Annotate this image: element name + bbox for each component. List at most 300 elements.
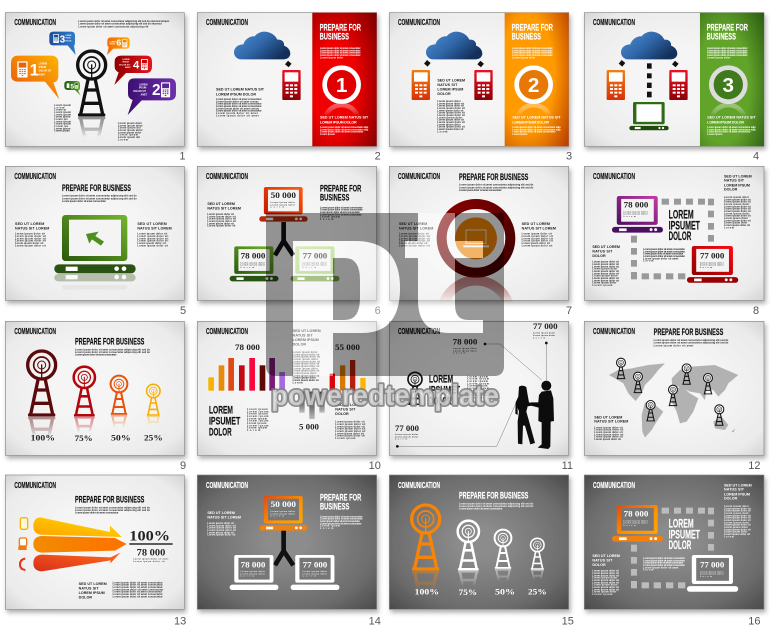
text block: bottom: DOLOR	[79, 595, 92, 599]
heading: lorem ipsumet dolor: IPSUMET	[429, 385, 460, 397]
text block: Lorem ipsum	[467, 387, 490, 390]
panel: red sidebar: Lorem ipsum dolor	[320, 56, 343, 59]
text block: intro: Lorem ipsum dolor sit amet consectetur adipiscing elit sed do	[459, 505, 534, 508]
text block: right: Lorem ipsum dolor sit	[137, 244, 168, 247]
text block: left	[207, 202, 241, 228]
icon: orange phone	[18, 538, 27, 550]
page number: 2	[375, 150, 381, 162]
text block: lower right: NATUS SIT	[335, 407, 356, 411]
tower 100%	[410, 503, 442, 594]
text block: right: Lorem ipsum	[320, 216, 341, 219]
text block: centre: Lorem ipsum dolor sit amet	[643, 566, 678, 569]
bubble 4 red: IPSUM	[122, 62, 129, 64]
callout: 77 000 bottom: Lorem ipsum dolor	[395, 435, 419, 438]
page number: 9	[180, 460, 186, 472]
text block: lower left: Lorem ipsum dolor	[592, 577, 617, 580]
panel: red sidebar: Lorem ipsum dolor sit amet consectetur adip	[320, 126, 369, 129]
icon: green laptop	[54, 215, 136, 273]
text block: lower left: Lorem ipsum	[592, 593, 613, 596]
panel: red sidebar: Lorem ipsum	[320, 133, 336, 136]
panel: orange sidebar: Lorem ipsum dolor sit amet consectetur	[512, 131, 556, 134]
laptop: 77 000	[291, 555, 339, 590]
text block: right	[522, 222, 556, 247]
text block: Lorem ipsum dolor sit amet	[216, 114, 259, 117]
text block	[467, 375, 490, 399]
text block: top right: Lorem ipsum dolor	[724, 531, 747, 534]
text block: Lorem ipsum dolor sit	[437, 126, 465, 129]
connector	[275, 531, 293, 565]
heading: lorem ipsumet dolor: LOREM	[669, 516, 694, 530]
heading: communication: COMMUNICATION	[206, 327, 248, 336]
text block: lower left: Lorem ipsum dolor sit	[592, 270, 619, 273]
page number: 6	[375, 305, 381, 317]
laptop: 77 000: Lorem ipsum dolor	[303, 570, 327, 573]
icon: green laptop	[629, 102, 669, 130]
text block: left column: Lorem ip	[54, 109, 66, 112]
laptop: 50 000	[259, 496, 308, 531]
text block: intro	[62, 195, 137, 203]
bubble 2 purple: 2	[152, 82, 161, 99]
callout: 77 000 bottom: 77 000	[395, 424, 419, 433]
text block: Lorem ipsum	[467, 392, 490, 395]
panel: green sidebar: Lorem ipsum dolor sit amet consectetur	[707, 131, 751, 134]
text block: top centre: Lorem	[293, 381, 303, 384]
text block: left: Lorem ipsum dolor sit	[207, 527, 236, 530]
text block: right column: Lorem	[118, 138, 129, 141]
panel: green sidebar: Lorem ipsum dolor sit amet consectetur	[707, 54, 748, 57]
heading: prepare for business	[320, 492, 361, 511]
text block: centre	[643, 557, 685, 572]
bar chart: right bars	[330, 360, 366, 391]
panel: orange sidebar: PREPARE FOR	[512, 23, 553, 33]
page number: 14	[369, 615, 381, 627]
text block: top right: Lorem ipsum dolor sit	[724, 519, 751, 522]
laptop: 50 000: 50 000	[271, 500, 296, 509]
text block: Lorem ipsum dolor sit	[437, 112, 465, 115]
text block: top right: Lorem ipsum dolor	[724, 203, 749, 206]
text block: right: Lorem ipsum dolor sit amet consectetur	[320, 522, 362, 525]
text block: top right: Lorem ipsum dolor sit	[724, 533, 750, 536]
bubble 2 purple: DOLOR SIT	[133, 91, 147, 93]
panel: red sidebar: Lorem ipsum dolor sit amet consectetur	[320, 131, 363, 134]
text block: lower right: Lorem ipsum	[335, 437, 356, 440]
icon: orange phone	[607, 70, 625, 100]
bubble 2 purple: IPSUM	[139, 88, 146, 90]
text block: right: Lorem ipsum dolor sit	[522, 242, 550, 245]
laptop: 77 000: Lorem	[700, 266, 712, 269]
heading: lorem ipsumet dolor: DOLOR	[669, 538, 691, 552]
laptop: 77 000: Lorem	[303, 266, 316, 269]
tower 100%: 100%	[31, 433, 55, 442]
laptop: 78 000: 78 000	[624, 510, 648, 519]
text block: lower: Lorem ipsum	[247, 424, 269, 427]
panel: slide 15 dark towers percent	[389, 475, 574, 630]
text block: LOREM IPSUM DOLOR	[216, 92, 256, 96]
text block: lower left: Lorem ipsum dolor	[592, 275, 618, 278]
laptop: 77 000: Lorem ipsum dolor	[303, 264, 327, 267]
text block: top centre: Lorem ipsum dolor	[293, 377, 316, 380]
text block: lower left: Lorem ipsum dolor sit	[592, 263, 619, 266]
text block: top centre: Lorem ipsum dolor sit	[293, 353, 319, 356]
text block: top right: Lorem ipsum dolor sit	[724, 215, 751, 218]
text block: intro: Lorem ipsum dolor sit amet consectetur adipiscing elit sed do	[459, 184, 534, 187]
text block: lower right: Lorem ipsum dolor sit	[335, 430, 365, 433]
text block: lower: Lorem ipsum	[247, 417, 268, 420]
panel: slide 5 big laptop	[5, 166, 186, 317]
tower 25%	[528, 538, 546, 594]
text block: intro: Lorem ipsum dolor sit amet consectetur adipiscing elit sed do	[459, 186, 534, 189]
laptop: 78 000: Lorem ipsum dolor	[624, 522, 648, 525]
text block: intro: Lorem ipsum dolor sit amet consectetur adipiscing elit sed do	[75, 351, 150, 354]
laptop: 78 000: Lorem ipsum dolor	[624, 213, 648, 216]
laptop: 77 000	[291, 246, 339, 281]
page number: 3	[566, 150, 572, 162]
text block: left: SED UT LOREM	[399, 222, 427, 226]
text block: left: NATUS SIT LOREM	[15, 227, 49, 231]
bubble 1 orange: AMET	[39, 73, 46, 76]
panel: slide 12 world map	[584, 321, 764, 472]
text block: left: Lorem ipsum dolor sit	[15, 242, 44, 245]
bubble 6 orange: 6	[116, 38, 121, 48]
callout: 100% and 78 000: 78 000	[137, 547, 166, 557]
text block: top right: Lorem ipsum dolor sit	[724, 219, 751, 222]
text block: top right: Lorem ipsum dolor	[724, 212, 749, 215]
text block: Lorem ipsum dolor sit	[594, 433, 623, 436]
laptop: 50 000: Lorem ipsum dolor	[271, 201, 295, 204]
panel: green sidebar	[700, 13, 764, 146]
connectors	[424, 60, 484, 67]
text block: lower: Lorem ipsum	[247, 408, 268, 411]
tower 75%: 75%	[75, 434, 93, 443]
text block: centre	[643, 248, 685, 263]
text block: centre: Lorem ipsum dolor sit amet consectetur	[643, 559, 685, 562]
tower 100%	[26, 349, 58, 440]
text block: left: Lorem ipsum dolor sit	[207, 218, 236, 221]
laptop: 50 000: Lorem ipsum dolor	[271, 203, 295, 206]
text block: intro: Lorem ipsum dolor sit amet	[654, 344, 693, 347]
icon: arrow cursor	[86, 232, 104, 246]
text block: left: Lorem ipsum dolor sit	[15, 244, 46, 247]
leader dots	[396, 342, 548, 448]
panel: orange sidebar: Lorem ipsum	[512, 133, 528, 136]
heading: prepare for business: PREPARE FOR BUSINESS	[75, 494, 144, 504]
text block: Lorem ipsum dolor sit amet	[216, 112, 258, 115]
text block: left: Lorem ipsum dolor sit	[399, 233, 429, 236]
text block: top right: Lorem ipsum dolor	[724, 521, 749, 524]
heading: communication: COMMUNICATION	[398, 327, 440, 336]
text block: lower right	[335, 403, 365, 440]
heading: communication: COMMUNICATION	[14, 481, 56, 490]
text block: lower left: NATUS SIT	[592, 249, 613, 253]
laptop reflection	[54, 274, 136, 290]
heading: communication: COMMUNICATION	[206, 172, 248, 181]
laptop: 78 000	[230, 555, 278, 590]
text block: bottom: LOREM IPSUM	[79, 591, 105, 595]
heading: communication: COMMUNICATION	[398, 18, 440, 27]
bubble 4 red: 4	[133, 59, 140, 71]
text block: Lorem ipsum dolor sit	[437, 107, 465, 110]
text block: left: Lorem ipsum dolor sit	[207, 215, 236, 218]
text block: top right: NATUS SIT	[724, 179, 745, 183]
laptop: 78 000: 78 000	[241, 252, 265, 261]
text block: top right: NATUS SIT	[724, 488, 745, 492]
text block: top right: SED UT LOREM	[724, 483, 752, 487]
icon: red phone	[669, 70, 688, 100]
text block: Lorem ipsum dolor sit	[594, 426, 623, 429]
text block: lower left: Lorem ipsum dolor sit	[592, 570, 619, 573]
bubble 3 blue	[49, 32, 76, 55]
text block: bottom: Lorem ipsum dolor sit amet consectetur	[113, 584, 163, 587]
text block	[594, 415, 628, 441]
text block: top right: Lorem ipsum dolor sit	[724, 198, 751, 201]
bubble 4 red: LOREM	[122, 59, 130, 61]
heading: prepare for business: BUSINESS	[320, 192, 349, 202]
tower 50%	[494, 528, 514, 594]
page number: 13	[174, 615, 186, 627]
text block: bottom: SED UT LOREM	[79, 582, 107, 586]
ring reflection	[440, 276, 512, 302]
laptop: 50 000	[259, 187, 308, 222]
panel: orange sidebar: Lorem ipsum dolor sit amet consectetur adip	[512, 126, 561, 129]
text block: right: Lorem	[320, 218, 334, 221]
page number: 8	[753, 305, 759, 317]
text block: right: Lorem ipsum dolor sit amet consectetur	[320, 520, 360, 523]
panel: green sidebar: SED UT LOREM NATUS SIT	[707, 116, 756, 120]
callout: 78 000: Lorem ipsum dolor	[453, 347, 477, 350]
text block: lower right: SED UT LOREM	[335, 403, 363, 407]
text block: left column: Lorem ips	[54, 118, 68, 121]
text block: lower left: Lorem ipsum dolor sit	[592, 261, 619, 264]
page number: 5	[180, 305, 186, 317]
panel: green sidebar: Lorem ipsum dolor	[707, 56, 730, 59]
text block: intro: Lorem ipsum dolor sit amet consectetur adipiscing elit sed do	[654, 339, 729, 342]
text block: right: Lorem ipsum dolor sit	[137, 237, 168, 240]
laptop: 78 000	[612, 505, 663, 542]
heading: prepare for business: BUSINESS	[320, 501, 349, 511]
heading: lorem ipsumet dolor: DOLOR	[209, 427, 232, 439]
panel: orange sidebar: 2	[528, 74, 539, 97]
text block: lower left: Lorem ipsum dolor	[592, 268, 617, 271]
text block: centre: Lorem	[643, 569, 654, 572]
heading: lorem ipsumet dolor	[429, 373, 460, 407]
text block: top right: Lorem ipsum dolor sit	[724, 210, 751, 213]
text block: Lorem ipsum	[467, 375, 489, 378]
icon: yellow phone	[20, 518, 28, 529]
heading: prepare for business: PREPARE FOR	[320, 492, 361, 502]
text block: top right: Lorem ipsum dolor	[724, 196, 749, 199]
text block: LOREM IPSUM	[437, 87, 463, 91]
panel: slide 9 towers percent	[5, 321, 186, 482]
text block: lower right: Lorem ipsum dolor sit	[335, 423, 365, 426]
text block: left column: Lorem ipsum	[54, 116, 71, 119]
callout: 77 000 bottom: Lorem ipsum dolor	[395, 433, 419, 436]
bubble 5 green	[64, 81, 81, 96]
text block: right column: Lorem ipsum dolor	[118, 129, 143, 132]
panel: orange sidebar: LOREM IPSUM DOLOR	[512, 120, 549, 124]
icon: orange phone	[412, 70, 430, 100]
text block: top right: Lorem	[724, 535, 735, 538]
text block: intro: Lorem ipsum dolor sit amet consectetur	[75, 354, 117, 357]
laptop: 78 000: 78 000	[241, 560, 265, 569]
watermark logo	[266, 213, 504, 376]
tower reflection	[78, 116, 106, 136]
laptop: 78 000: Lorem ipsum dolor	[241, 572, 265, 575]
text block: Lorem ipsum dolor sit	[594, 429, 623, 432]
text block: Lorem ipsum dolor sit amet consectetur	[216, 103, 262, 106]
text block: right: Lorem ipsum dolor sit	[522, 244, 552, 247]
panel: slide 16 dark laptops connected by squares	[584, 475, 764, 627]
text block: SED UT LOREM	[437, 78, 465, 82]
text block: right: Lorem ipsum dolor sit amet consectetur	[320, 518, 363, 521]
panel: red sidebar: PREPARE FOR	[320, 23, 361, 33]
text block: right column: Lorem ipsum dol	[118, 127, 141, 130]
text block: lower left: Lorem ipsum dolor sit	[592, 272, 619, 275]
panel: green sidebar: Lorem ipsum dolor sit amet consectetur	[707, 52, 748, 55]
chart value: 5 000: 5 000	[299, 422, 319, 431]
text block: top right: DOLOR	[724, 188, 738, 192]
text block: Lorem ipsum dolor	[437, 100, 461, 103]
bubble 1 orange: DOLOR SIT	[39, 71, 52, 73]
panel: red sidebar: Lorem ipsum dolor sit amet consectetur	[320, 52, 361, 55]
text block: centre: Lorem ipsum dolor sit amet consectetur	[643, 250, 685, 253]
text block: intro: Lorem ipsum dolor sit amet consectetur adipiscing elit sed do	[62, 195, 137, 198]
text block: Lorem ipsum	[467, 389, 488, 392]
laptop: 78 000: Lorem	[624, 524, 636, 527]
text block: top right: Lorem ipsum dolor	[724, 512, 749, 515]
laptop: 77 000: 77 000	[303, 252, 327, 261]
text block: top centre: Lorem ipsum dolor sit	[293, 360, 320, 363]
heading: prepare for business	[320, 184, 361, 202]
text block: lower left: Lorem ipsum dolor sit	[592, 574, 619, 577]
bubble 3 blue: IPSUM	[65, 38, 71, 40]
text block: lower: Lorem ipsum	[247, 415, 269, 418]
callout: 77 000 bottom	[395, 424, 419, 441]
page number: 16	[748, 615, 761, 627]
text block: Lorem ipsum dolor sit	[437, 105, 464, 108]
text block: top right: Lorem ipsum dolor sit	[724, 224, 750, 227]
laptop: 78 000: Lorem ipsum dolor	[624, 519, 648, 522]
heading: lorem ipsumet dolor	[669, 207, 700, 243]
text block: top centre: Lorem ipsum dolor	[293, 372, 317, 375]
text block: lower right: Lorem ipsum dolor sit	[335, 435, 365, 438]
panel: red sidebar: Lorem ipsum dolor sit amet consectetur	[320, 54, 361, 57]
text block: top centre: Lorem ipsum dolor sit	[293, 365, 319, 368]
text block: bottom: Lorem ipsum dolor sit amet consectetur	[113, 595, 163, 598]
text block: left: Lorem ipsum dolor sit	[207, 524, 236, 527]
text block: left	[15, 222, 49, 247]
heading: communication: COMMUNICATION	[398, 481, 440, 490]
text block: left: Lorem ipsum dolor sit	[399, 237, 430, 240]
panel: green sidebar: 3	[723, 74, 734, 97]
laptop: 78 000: 78 000	[624, 201, 648, 210]
panel: slide 11 business people	[389, 321, 573, 472]
text block: right column: Lorem ipsum dolor	[118, 122, 142, 125]
text block: intro	[654, 339, 729, 347]
text block: right: Lorem ipsum dolor sit amet consectetur	[320, 515, 363, 518]
bubble 6 orange	[107, 37, 130, 55]
text block: Lorem ipsum dolor sit amet consec	[216, 100, 259, 103]
text block: left: Lorem ipsum dolor sit	[15, 235, 46, 238]
text block: right: NATUS SIT LOREM	[522, 227, 556, 231]
arrow: yellow	[33, 517, 122, 537]
bar chart: negative bars	[299, 392, 325, 419]
laptop: 78 000: Lorem	[241, 575, 254, 578]
panel: slide 14 dark laptop network	[197, 475, 381, 627]
panel: slide 10 bar chart	[197, 321, 381, 472]
laptop: 50 000: Lorem ipsum dolor	[271, 510, 295, 513]
text block: top centre: DOLOR	[293, 342, 306, 346]
panel: green sidebar: LOREM IPSUM DOLOR	[707, 120, 744, 124]
text block: Lorem ipsum	[467, 380, 489, 383]
text block: right: Lorem	[320, 527, 334, 530]
laptop: 78 000: Lorem ipsum dolor	[241, 570, 265, 573]
text block: left column: Lorem ipsum	[54, 130, 70, 133]
text block: left column: Lorem ipsum	[54, 104, 72, 107]
panel: slide 3 cloud and two phones	[389, 13, 572, 162]
text block: Lorem ipsum	[467, 394, 488, 397]
panel: red sidebar	[312, 13, 377, 146]
text block: right	[320, 206, 363, 221]
text block: left: SED UT LOREM	[207, 202, 235, 206]
text block: NATUS SIT	[437, 83, 458, 87]
text block: top centre: Lorem ipsum dolor sit	[293, 363, 319, 366]
text block: left	[207, 511, 241, 537]
text block: top right: Lorem ipsum dolor	[724, 217, 748, 220]
tower 50%: 50%	[111, 433, 131, 442]
panel: slide 1 tower with speech bubbles	[4, 12, 189, 160]
text block: right column: Lorem ipsum dolor	[118, 131, 141, 134]
text block: centre: Lorem ipsum dolor sit amet consectetur	[643, 562, 683, 565]
ring	[442, 204, 510, 273]
heading: lorem ipsumet dolor: LOREM	[669, 207, 694, 221]
text block: top right: DOLOR	[724, 497, 738, 501]
text block: top centre: LOREM IPSUM	[293, 338, 319, 342]
callout: 77 000 top	[533, 322, 558, 339]
tower 25%	[144, 384, 162, 440]
page number: 12	[748, 460, 761, 472]
callout: 100% and 78 000: 100%	[129, 529, 170, 545]
map towers	[616, 358, 724, 426]
text block: lower left: Lorem ipsum dolor sit	[592, 581, 619, 584]
icon: tower	[78, 51, 106, 116]
text block: left: Lorem ipsum dolor sit	[207, 531, 234, 534]
text block: top right: Lorem ipsum dolor sit	[724, 528, 751, 531]
bubble 3 blue: 3	[60, 34, 66, 45]
panel: orange sidebar: Lorem ipsum dolor sit amet consectetur	[512, 52, 553, 55]
text block	[216, 88, 265, 117]
text block: right: Lorem ipsum	[320, 525, 341, 528]
heading: communication: COMMUNICATION	[593, 172, 635, 181]
text block: bottom: NATUS SIT	[79, 586, 99, 590]
text block: lower: Lorem	[247, 429, 261, 432]
callout: 77 000 bottom: Lorem	[395, 438, 407, 441]
text block: left	[399, 222, 433, 247]
bubble 4 red: DOLOR SIT	[119, 64, 131, 66]
text block: lower left: Lorem ipsum dolor	[592, 282, 616, 285]
heading: lorem ipsumet dolor: DOLOR	[429, 395, 452, 407]
text block: right: SED UT LOREM	[137, 222, 167, 226]
heading: lorem ipsumet dolor	[209, 405, 240, 439]
laptop: 78 000: Lorem	[241, 266, 254, 269]
text block: left: Lorem ipsum dolor sit	[15, 237, 46, 240]
text block: left: Lorem ipsum dolor sit	[207, 213, 234, 216]
callout: 77 000 top: Lorem	[533, 336, 545, 339]
text block: lower left: Lorem ipsum dolor sit	[592, 265, 619, 268]
text block: top centre: NATUS SIT	[293, 334, 313, 338]
icon: tower	[408, 372, 422, 405]
text block: left column: Lorem ipsum	[54, 113, 72, 116]
text block: right: SED UT LOREM	[522, 222, 550, 226]
